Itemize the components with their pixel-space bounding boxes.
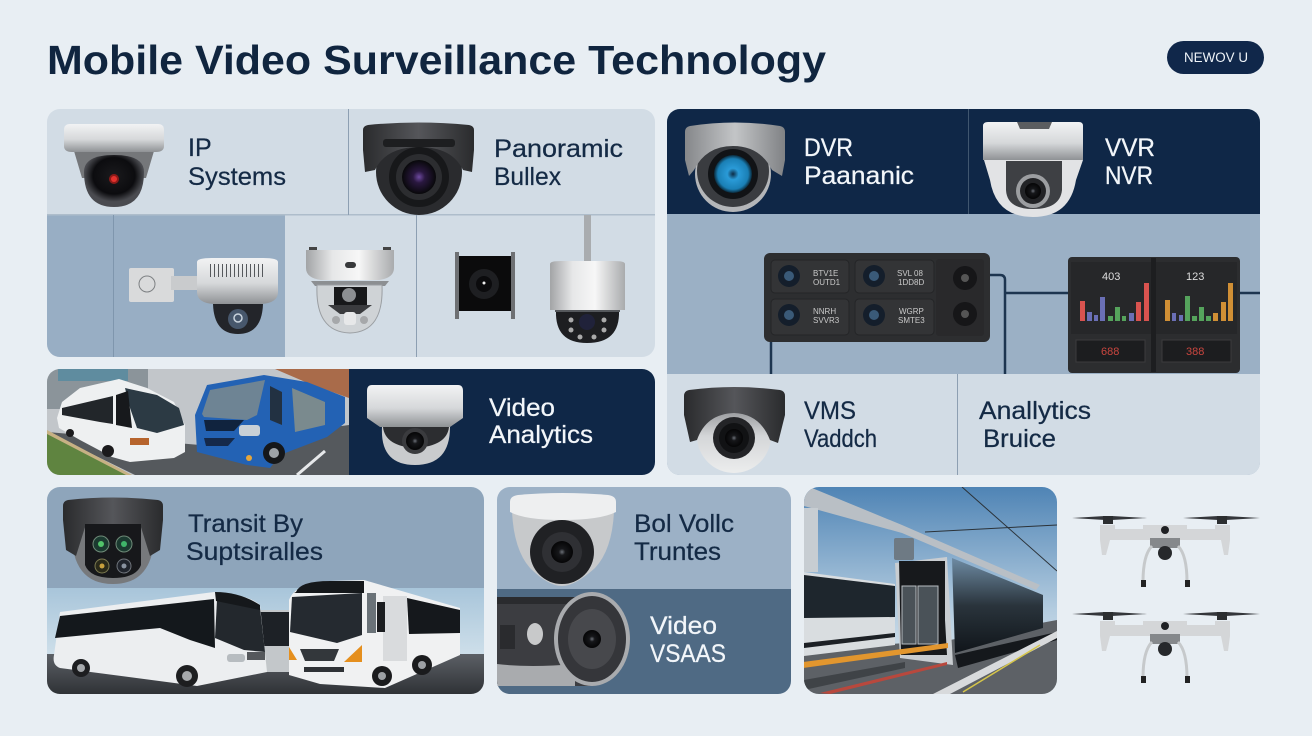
text: Bol Vollc Truntes: [634, 514, 734, 560]
text: IP Systems: [188, 134, 286, 191]
control panel device: NNRH: [813, 307, 836, 316]
icon: wall-mounted dome camera: [129, 258, 278, 334]
text: VMS Vaddch: Vaddch: [804, 425, 877, 453]
icon: DVR dome camera with blue lens: [685, 122, 785, 212]
icon: NVR white dome camera: [983, 122, 1083, 217]
text: IP Systems: IP: [188, 134, 212, 162]
control panel device: [764, 253, 990, 342]
text: VMS Vaddch: VMS: [804, 397, 856, 425]
icon: silver panoramic dome camera: [306, 247, 394, 333]
panel: buses and video analytics: [47, 369, 655, 475]
connector lines: [771, 275, 1260, 374]
control panel device: WGRP: [899, 307, 924, 316]
control panel device: BTV1E: [813, 269, 838, 278]
sub: platform markings: [803, 631, 1057, 694]
panel: VSaaS: [497, 487, 791, 694]
text: Panoramic Bullex: [496, 138, 622, 186]
photo: parked coaches: [47, 580, 484, 694]
text: Video VSAAS: [650, 616, 725, 662]
badge: NEWOV U: [1184, 50, 1248, 65]
bar chart: right: [1165, 283, 1233, 321]
text: Analytics Bruice: [978, 400, 1090, 448]
text: Video VSAAS: VSAAS: [650, 640, 726, 668]
text: IP Systems: Systems: [188, 163, 286, 191]
title: Mobile Video Surveillance Technology: [47, 37, 826, 83]
icon: black dome camera with purple lens: [363, 122, 474, 215]
text: VVR NVR: NVR: [1105, 162, 1153, 190]
panel: IP systems and panoramic cameras: [47, 109, 655, 357]
text: DVR Paananic: Paananic: [804, 162, 914, 190]
sub: left coach: [54, 592, 267, 687]
sub: right coach: [289, 580, 460, 688]
sub: white bus: [57, 379, 185, 462]
panel: recording systems: [667, 109, 1260, 475]
icon: cylinder bullet camera: [497, 592, 630, 686]
text: DVR Paananic: [806, 138, 914, 184]
icon: multi-lens black dome camera: [63, 498, 163, 584]
icon: white dome camera with red dot: [64, 124, 164, 207]
text: VVR NVR: VVR: [1105, 134, 1155, 162]
photo: white and blue buses: [47, 369, 349, 475]
text: DVR Paananic: DVR: [804, 134, 853, 162]
icon: drone bottom: [1072, 612, 1260, 683]
text: Video Analytics: [489, 394, 593, 449]
icon: square black box camera: [455, 252, 515, 319]
control panel device: SVL 08: [897, 269, 923, 278]
text: Bol Vollc Truntes: Truntes: [634, 538, 721, 566]
bar chart: left: [1080, 283, 1149, 321]
text: Transit By Suptsiralles: Suptsiralles: [186, 538, 323, 566]
control panel device: OUTD1: [813, 278, 841, 287]
text: Transit By Suptsiralles: [186, 510, 323, 566]
photo: transit station: [803, 487, 1057, 694]
control panel device: 1DD8D: [898, 278, 924, 287]
badge: [1167, 41, 1264, 74]
sub: platform train: [804, 572, 895, 656]
control panel device: SVVR3: [813, 316, 840, 325]
panel: transit buses: [47, 487, 484, 694]
sub: glass tram: [894, 538, 1057, 668]
dashboard with bar charts: 403: [1102, 271, 1120, 283]
text: Video Analytics: Analytics: [489, 421, 593, 449]
icon: drone top: [1072, 516, 1260, 587]
text: Panoramic Bullex: Bullex: [494, 163, 561, 191]
text: Panoramic Bullex: Panoramic: [494, 135, 623, 163]
dashboard with bar charts: 388: [1186, 346, 1204, 358]
text: Video VSAAS: Video: [650, 612, 717, 640]
dashboard with bar charts: 123: [1186, 271, 1204, 283]
control panel device: SMTE3: [898, 316, 925, 325]
text: Bol Vollc Truntes: Bol Vollc: [634, 510, 734, 538]
text: Transit By Suptsiralles: Transit By: [188, 510, 304, 538]
text: VMS Vaddch: [804, 401, 876, 448]
dashboard with bar charts: 688: [1101, 346, 1119, 358]
text: VVR NVR: [1105, 138, 1154, 184]
icon: silver dome camera with large lens: [510, 493, 616, 586]
text: Analytics Bruice: Anallytics: [979, 397, 1091, 425]
text: Analytics Bruice: Bruice: [983, 425, 1056, 453]
icon: VMS dome camera: [684, 387, 785, 473]
sub: blue bus: [195, 375, 345, 475]
icon: pole-mounted dome camera: [550, 215, 625, 343]
dashboard with bar charts: [1068, 257, 1240, 373]
text: Video Analytics: Video: [489, 394, 555, 422]
icon: silver dome camera: [367, 385, 463, 465]
